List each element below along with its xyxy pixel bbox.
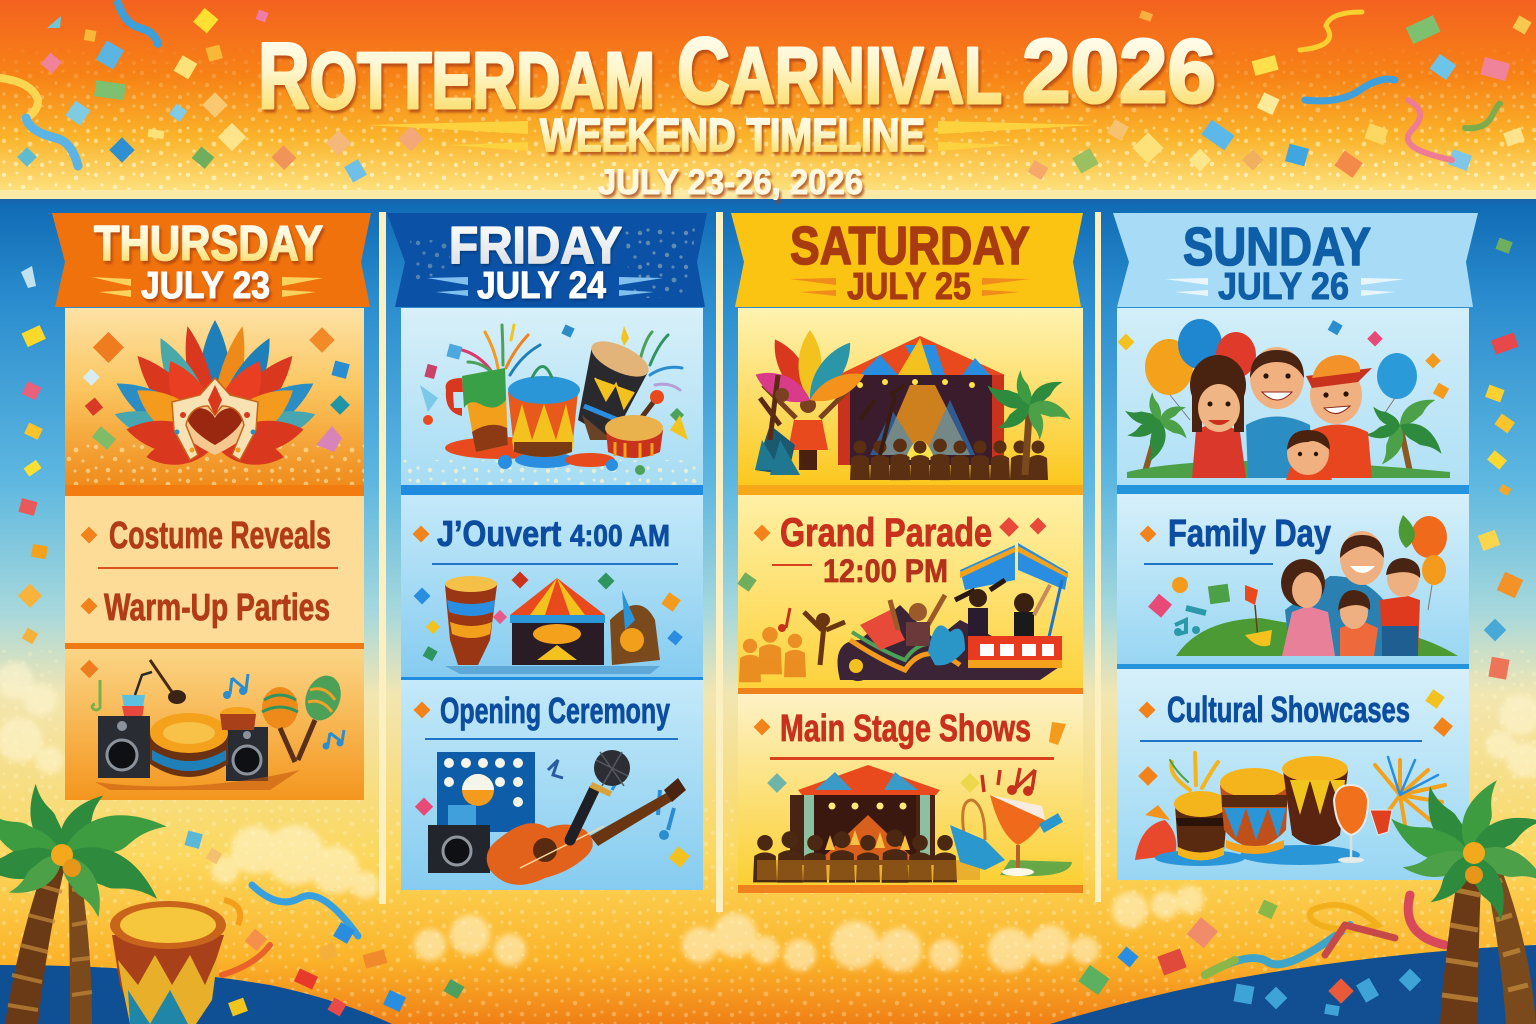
event: Grand Parade 12:00 PM	[754, 511, 992, 589]
column: Friday	[387, 213, 707, 890]
event: Opening Ceremony	[414, 690, 678, 740]
column: Saturday	[731, 213, 1083, 893]
Thursday panel background	[65, 308, 364, 800]
header band	[0, 0, 1536, 204]
Friday panel background	[401, 308, 703, 890]
event: Costume Reveals: Costume Reveals	[109, 515, 331, 557]
sea and shore: left	[0, 965, 392, 1024]
event: Family Day: Family Day	[1168, 513, 1331, 555]
Sunday panel background	[1117, 308, 1469, 880]
title: CARNIVAL	[677, 18, 1002, 123]
icon: palm tree left	[0, 782, 169, 1024]
sea and shore: right	[1050, 945, 1536, 1024]
Thursday banner: THURSDAY	[94, 217, 323, 271]
icon: conga and tent	[414, 572, 683, 674]
column dividers	[379, 212, 1101, 912]
event: Family Day	[1140, 513, 1331, 565]
event: Warm-Up Parties: Warm-Up Parties	[104, 587, 330, 629]
Sunday banner	[1113, 213, 1478, 308]
bottom confetti	[184, 830, 1421, 1017]
Thursday banner: JULY 23	[141, 265, 270, 307]
event: Grand Parade 12:00 PM: 12:00 PM	[823, 553, 948, 589]
icon: family with balloons	[1118, 319, 1450, 480]
clouds	[0, 662, 1536, 972]
icon: main stage crowd and cocktail	[753, 765, 1072, 883]
event: J'Ouvert 4:00 AM: J’Ouvert 4:00 AM	[437, 513, 670, 554]
event: Cultural Showcases	[1139, 689, 1453, 742]
Friday banner: JULY 24	[477, 265, 606, 307]
Sunday banner: SUNDAY	[1183, 217, 1371, 277]
event: Warm-Up Parties	[81, 587, 330, 629]
Saturday banner: JULY 25	[847, 266, 971, 308]
header confetti	[17, 8, 1532, 183]
icon: drums	[420, 324, 688, 475]
event: J'Ouvert 4:00 AM	[413, 513, 678, 565]
event: Cultural Showcases: Cultural Showcases	[1167, 689, 1410, 730]
event: Costume Reveals	[81, 515, 338, 569]
title	[258, 18, 1216, 128]
bottom ribbons	[222, 885, 1445, 975]
icon: drums and drinks	[1135, 753, 1445, 866]
icon: palm tree right	[1383, 774, 1536, 1024]
event: Main Stage Shows: Main Stage Shows	[780, 708, 1031, 750]
event: Main Stage Shows	[754, 708, 1066, 760]
Saturday banner	[731, 213, 1083, 308]
event: Opening Ceremony: Opening Ceremony	[440, 690, 670, 731]
icon: parade float	[737, 517, 1068, 682]
title: ROTTERDAM	[258, 23, 655, 128]
icon: music gear	[80, 660, 347, 790]
icon: conga drum bottom left	[110, 900, 240, 1024]
icon: guitar and microphone	[415, 750, 690, 885]
Thursday banner	[52, 213, 371, 307]
side confetti right	[1478, 238, 1523, 680]
Friday banner: FRIDAY	[449, 217, 622, 275]
subtitle	[367, 109, 1095, 161]
column: Thursday	[52, 213, 371, 800]
icon: family on the hill	[1148, 515, 1458, 656]
subtitle: WEEKEND TIMELINE	[540, 109, 925, 161]
Friday banner	[387, 213, 707, 307]
Sunday banner: JULY 26	[1218, 266, 1349, 308]
icon: festival stage with dancer	[751, 330, 1074, 480]
event: Grand Parade 12:00 PM: Grand Parade	[780, 511, 992, 555]
title: 2026	[1022, 22, 1216, 122]
side confetti left	[18, 266, 48, 644]
Saturday panel background	[738, 308, 1083, 893]
Saturday banner: SATURDAY	[790, 216, 1030, 276]
icon: feather headdress	[83, 320, 350, 470]
header ribbons	[0, 3, 1500, 166]
column: Sunday	[1113, 213, 1478, 880]
date line: JULY 23-26, 2026	[598, 163, 863, 202]
